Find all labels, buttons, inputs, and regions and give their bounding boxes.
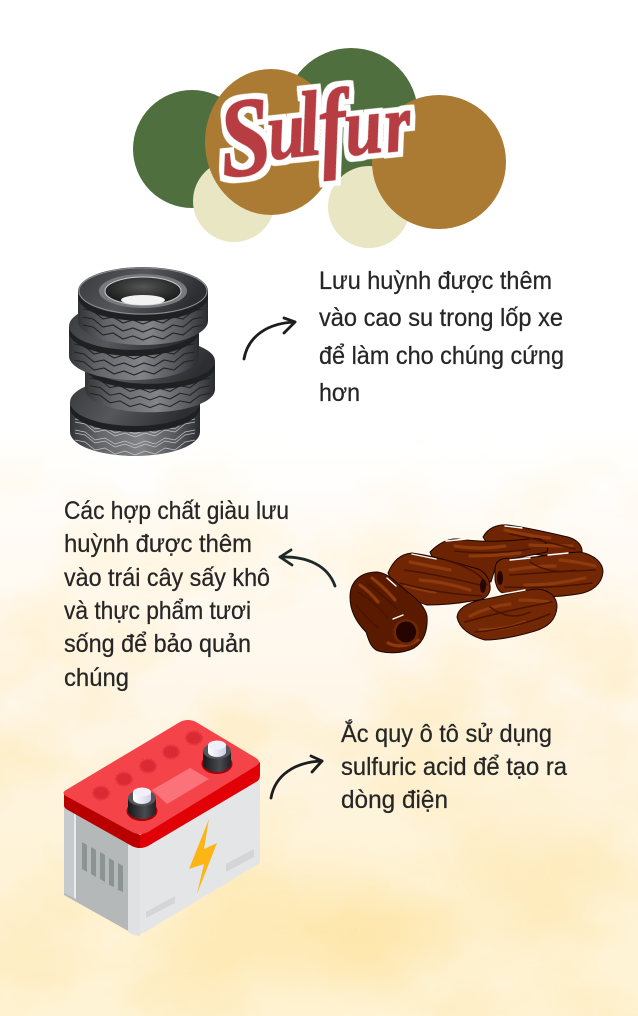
arrow: battery to text: [271, 756, 322, 798]
tire 4: [70, 378, 200, 456]
battery body left face: [64, 800, 130, 932]
date dark grooves: [356, 534, 595, 632]
text: tires: Lưu huỳnh được thêm: [319, 267, 552, 295]
text: battery: dòng điện: [341, 786, 448, 814]
vent caps: [93, 732, 202, 800]
battery corner strip: [64, 800, 76, 899]
battery body right face: [128, 772, 260, 934]
circle: cream right: [328, 166, 410, 248]
date: back long: [430, 538, 548, 582]
tire 1: [78, 267, 208, 345]
text: dried fruit: huỳnh được thêm: [64, 530, 252, 558]
title: Sulfur over painted circles: [133, 48, 506, 248]
circle: brown centre: [205, 69, 337, 215]
date: front left: [350, 572, 427, 653]
text: tires: hơn: [319, 379, 360, 407]
text: dried fruit: [64, 497, 289, 692]
battery vents: [82, 842, 123, 892]
circle: green left: [133, 90, 251, 208]
terminal rear: [202, 740, 232, 774]
icon: stack of tires: [69, 267, 215, 456]
icon: dried dates: [350, 525, 603, 653]
battery lid sides: [64, 762, 260, 848]
text: dried fruit: sống để bảo quản: [64, 630, 251, 658]
date hollow end: [393, 619, 419, 645]
heading text: f: [313, 68, 359, 182]
circle: green top: [284, 48, 418, 182]
date lighter streaks: [360, 530, 595, 646]
heading text: S: [213, 74, 277, 202]
heading text: u: [340, 80, 386, 174]
text: battery: Ắc quy ô tô sử dụng: [341, 718, 552, 748]
heading text: l: [293, 73, 325, 177]
text: tires: [319, 267, 564, 407]
icon: car battery: [64, 720, 260, 936]
text: battery: sulfuric acid để tạo ra: [341, 753, 567, 781]
battery label plates: [146, 849, 254, 918]
heading text: u: [263, 84, 309, 178]
lid window: [152, 768, 209, 804]
terminal front: [126, 788, 158, 821]
text: dried fruit: vào trái cây sấy khô: [64, 564, 270, 592]
arrow: tires to text: [244, 318, 295, 359]
date: back right: [483, 525, 582, 556]
text: dried fruit: và thực phẩm tươi: [64, 597, 251, 625]
date highlights: [387, 526, 568, 619]
heading text: r: [380, 77, 416, 171]
date: middle: [388, 553, 490, 605]
text: tires: vào cao su trong lốp xe: [319, 304, 563, 332]
text: dried fruit: Các hợp chất giàu lưu: [64, 497, 289, 525]
tire 2: [69, 302, 199, 380]
icon: lightning bolt: [189, 819, 217, 894]
text: battery: [341, 718, 567, 814]
text: dried fruit: chúng: [64, 664, 129, 692]
date: front bottom: [457, 589, 557, 640]
arrow: dates to text: [280, 550, 335, 586]
text: tires: để làm cho chúng cứng: [319, 342, 564, 370]
circle: brown right: [372, 95, 506, 229]
background: watercolor wash: [0, 430, 638, 1016]
date: right: [495, 552, 603, 597]
tire 3: [85, 338, 215, 412]
battery lid top: [64, 720, 259, 834]
circle: cream left: [193, 160, 275, 242]
